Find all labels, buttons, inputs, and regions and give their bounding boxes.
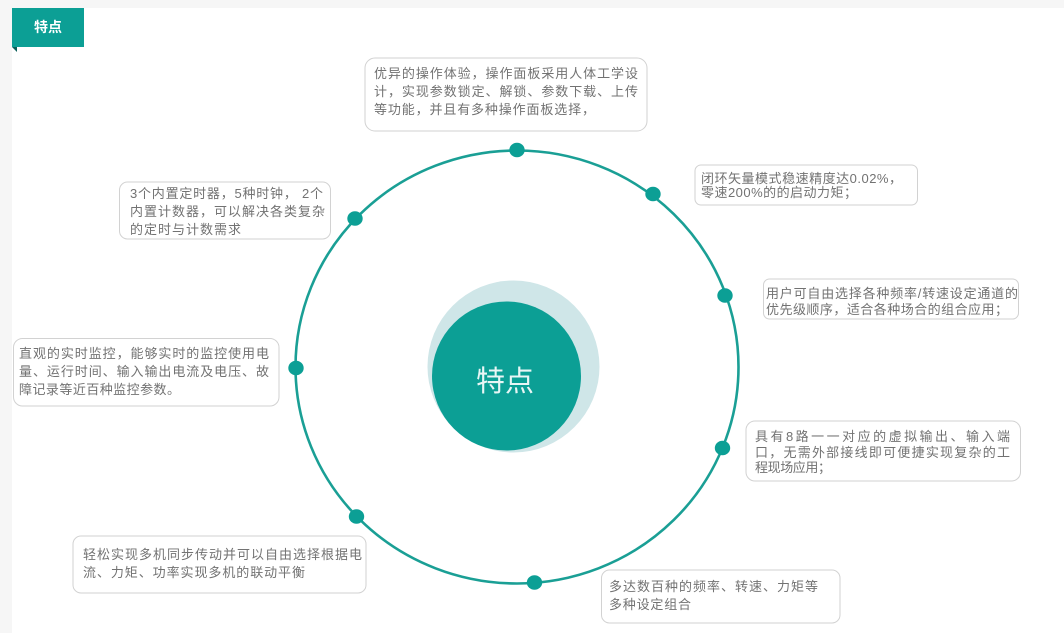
callout: channel priority: 优先级顺序，适合各种场合的组合应用； <box>766 302 1008 318</box>
callout: timers and counters <box>120 182 330 239</box>
callout: real-time monitoring: 量、运行时间、输入输出电流及电压、故 <box>19 364 269 379</box>
header tag: 特点 <box>34 19 62 35</box>
header tag <box>12 8 84 52</box>
orbit ring <box>296 150 738 584</box>
callout: setting combinations <box>602 570 840 623</box>
callout: closed-loop vector: 零速200%的的启动力矩； <box>701 185 857 201</box>
callout: closed-loop vector <box>695 165 918 205</box>
callout: virtual IO <box>746 421 1020 481</box>
callout: setting combinations: 多种设定组合 <box>609 597 691 612</box>
callout: timers and counters: 3个内置定时器，5种时钟， 2个 <box>130 183 323 202</box>
center badge: 特点 <box>476 365 534 398</box>
callout: channel priority <box>764 279 1018 319</box>
callout: virtual IO: 具有8路一一对应的虚拟输出、输入端 <box>755 429 1010 444</box>
callout: operation panel: 优异的操作体验，操作面板采用人体工学设 <box>374 63 638 82</box>
callout: setting combinations: 多达数百种的频率、转速、力矩等 <box>609 579 818 594</box>
callout: multi-machine sync <box>73 536 366 593</box>
orbit dots <box>288 143 733 590</box>
callout: operation panel: 计，实现参数锁定、解锁、参数下载、上传 <box>374 81 638 100</box>
callout: closed-loop vector: 闭环矢量模式稳速精度达0.02%， <box>701 171 902 186</box>
callout: real-time monitoring: 障记录等近百种监控参数。 <box>19 382 180 397</box>
callout: virtual IO: 口，无需外部接线即可便捷实现复杂的工 <box>755 445 1010 460</box>
center badge <box>428 280 600 452</box>
callout: timers and counters: 的定时与计数需求 <box>130 222 241 237</box>
callout: multi-machine sync: 流、力矩、功率实现多机的联动平衡 <box>83 565 305 580</box>
callout: real-time monitoring <box>14 338 279 406</box>
callout: timers and counters: 内置计数器，可以解决各类复杂 <box>130 201 325 220</box>
callout: operation panel: 等功能，并且有多种操作面板选择， <box>374 99 595 118</box>
callout: real-time monitoring: 直观的实时监控，能够实时的监控使用电 <box>19 343 269 362</box>
callout: operation panel <box>365 58 647 131</box>
callout: multi-machine sync: 轻松实现多机同步传动并可以自由选择根据电 <box>83 547 362 562</box>
callout: channel priority: 用户可自由选择各种频率/转速设定通道的 <box>766 286 1018 301</box>
callout: virtual IO: 程现场应用； <box>755 460 831 476</box>
